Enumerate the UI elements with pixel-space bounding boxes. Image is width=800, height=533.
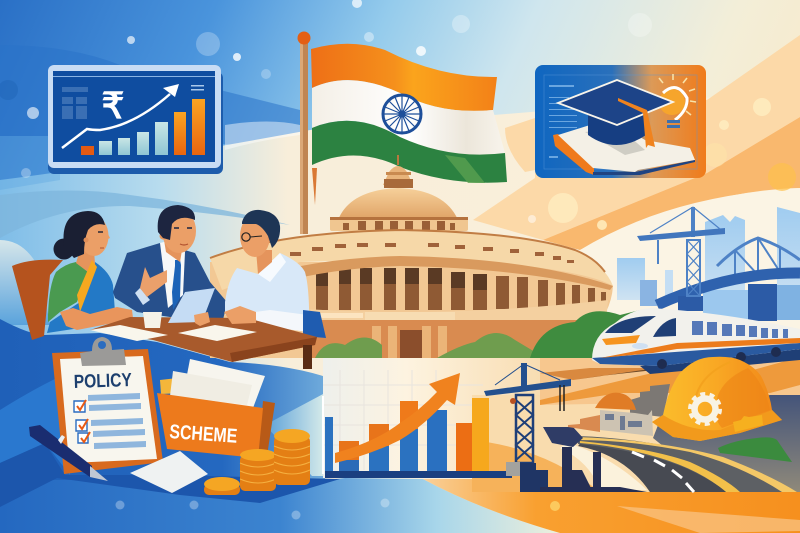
label: scheme: SCHEME xyxy=(169,421,238,448)
construction crane xyxy=(484,363,571,492)
chart growth arrow xyxy=(335,373,460,463)
folder xyxy=(157,359,275,458)
lower infrastructure ground xyxy=(472,357,800,492)
road xyxy=(560,436,797,492)
lower left blue wave xyxy=(0,319,342,480)
lower pale sky xyxy=(0,478,560,533)
light bulb xyxy=(659,74,696,128)
open book xyxy=(553,125,695,175)
hands xyxy=(194,306,256,326)
pale mint patch xyxy=(265,393,325,476)
roof xyxy=(210,230,613,290)
green shrub xyxy=(718,437,792,462)
flagpole xyxy=(298,32,310,234)
graduation cap xyxy=(558,80,673,148)
woman xyxy=(47,211,133,333)
lower shadow strip xyxy=(0,443,340,507)
label: policy: POLICY xyxy=(73,370,132,393)
orange swoosh band xyxy=(473,35,800,330)
lower orange light streak xyxy=(617,506,800,533)
man in suit xyxy=(113,205,227,320)
chair xyxy=(12,260,63,340)
graduation card xyxy=(535,65,706,178)
left pale blue fade xyxy=(0,240,50,325)
checklist xyxy=(74,393,146,449)
rupee symbol: ₹ xyxy=(102,85,124,126)
coffee cup xyxy=(143,312,162,328)
loose note xyxy=(130,451,208,493)
held document xyxy=(168,288,215,323)
base xyxy=(305,300,608,324)
bridge xyxy=(657,238,800,321)
dark overpass xyxy=(540,427,647,492)
bottom bokeh dots xyxy=(116,498,390,520)
background crane xyxy=(637,207,725,296)
man with glasses xyxy=(225,210,326,338)
clipboard xyxy=(52,337,163,474)
lighter blue band xyxy=(0,372,70,475)
chart card xyxy=(48,65,223,174)
high speed train xyxy=(592,308,800,374)
small town buildings xyxy=(568,393,653,436)
pen xyxy=(29,425,108,481)
coin stacks xyxy=(204,429,310,495)
green bushes xyxy=(315,310,640,358)
colonnade xyxy=(210,262,613,358)
hard hat xyxy=(652,357,782,441)
skyline xyxy=(617,207,800,320)
table xyxy=(90,317,317,369)
background bokeh dots xyxy=(0,0,796,230)
growth chart panel xyxy=(322,358,600,478)
chart bars xyxy=(325,398,489,472)
dome xyxy=(330,155,468,231)
lower right orange sweep xyxy=(423,479,800,533)
papers on table xyxy=(90,325,257,341)
left wave xyxy=(0,190,290,238)
chart baseline xyxy=(325,471,512,478)
indian flag xyxy=(311,44,507,205)
parliament building xyxy=(210,155,613,358)
